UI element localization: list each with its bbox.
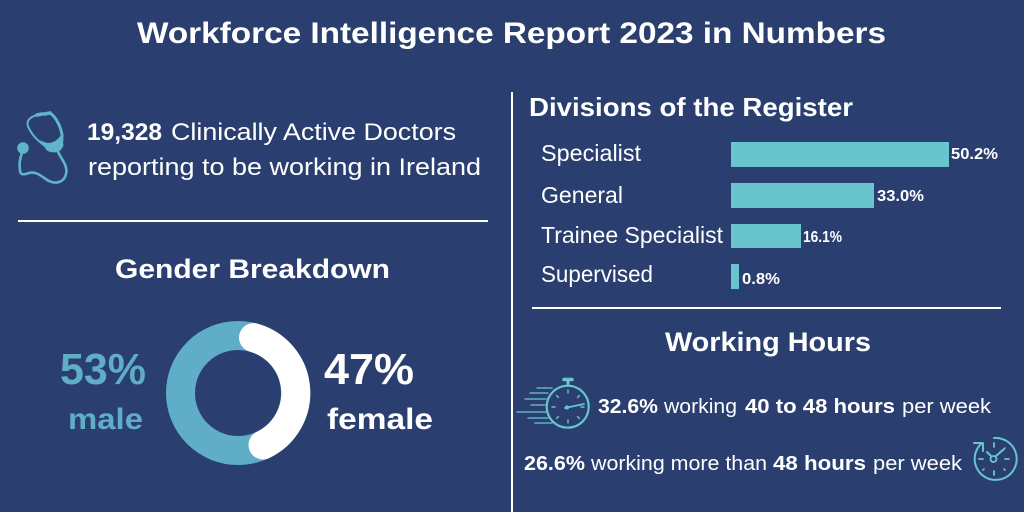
text: more than 48 hours: per week <box>873 453 963 475</box>
bar: supervised <box>541 261 780 289</box>
text: 40 to 48 hours: 40 to 48 hours <box>745 396 895 418</box>
panel: clinically active doctors <box>17 113 481 183</box>
icon: stopwatch <box>517 380 589 428</box>
text: 40 to 48 hours: per week <box>902 396 992 418</box>
heading: working hours: Working Hours <box>665 327 871 357</box>
text: 40 to 48 hours: working <box>663 396 737 418</box>
male share: 53% <box>60 345 146 394</box>
text: more than 48 hours <box>524 453 963 475</box>
donut chart <box>180 336 296 450</box>
bar: specialist <box>541 140 998 167</box>
bar: general: 33.0% <box>877 188 924 205</box>
title: Workforce Intelligence Report 2023 in Numbers <box>137 17 886 50</box>
text: more than 48 hours: 48 hours <box>773 453 866 475</box>
female share <box>324 345 433 436</box>
icon: clock with arrow <box>974 438 1017 480</box>
bar: trainee specialist: Trainee Specialist <box>541 222 724 248</box>
heading: divisions of the register: Divisions of the Register <box>529 92 853 122</box>
text: 40 to 48 hours: 32.6% <box>598 396 658 418</box>
text: more than 48 hours: 26.6% <box>524 453 585 475</box>
icon: stethoscope <box>17 113 66 183</box>
heading: gender breakdown: Gender Breakdown <box>115 254 390 284</box>
text: doctors count: Clinically Active Doctors <box>171 119 456 146</box>
male share <box>60 345 146 436</box>
bar: general: General <box>541 182 623 208</box>
text: more than 48 hours: working more than <box>590 453 767 475</box>
bar: general <box>541 182 924 208</box>
bar: specialist: 50.2% <box>951 146 998 163</box>
bar: supervised: Supervised <box>541 261 653 287</box>
panel: gender donut chart <box>60 336 433 450</box>
male share: male <box>68 403 143 436</box>
text: doctors count <box>87 119 481 181</box>
bar: trainee specialist: 16.1% <box>803 229 842 246</box>
bar: trainee specialist <box>541 222 842 248</box>
female share: female <box>327 403 433 436</box>
bar chart: divisions <box>541 140 998 289</box>
text: doctors count: reporting to be working in Ireland <box>88 154 481 181</box>
bar: specialist: Specialist <box>541 140 642 166</box>
female share: 47% <box>324 345 414 394</box>
text: doctors count: 19,328 <box>87 119 162 146</box>
text: 40 to 48 hours <box>598 396 992 418</box>
bar: supervised: 0.8% <box>742 271 780 288</box>
